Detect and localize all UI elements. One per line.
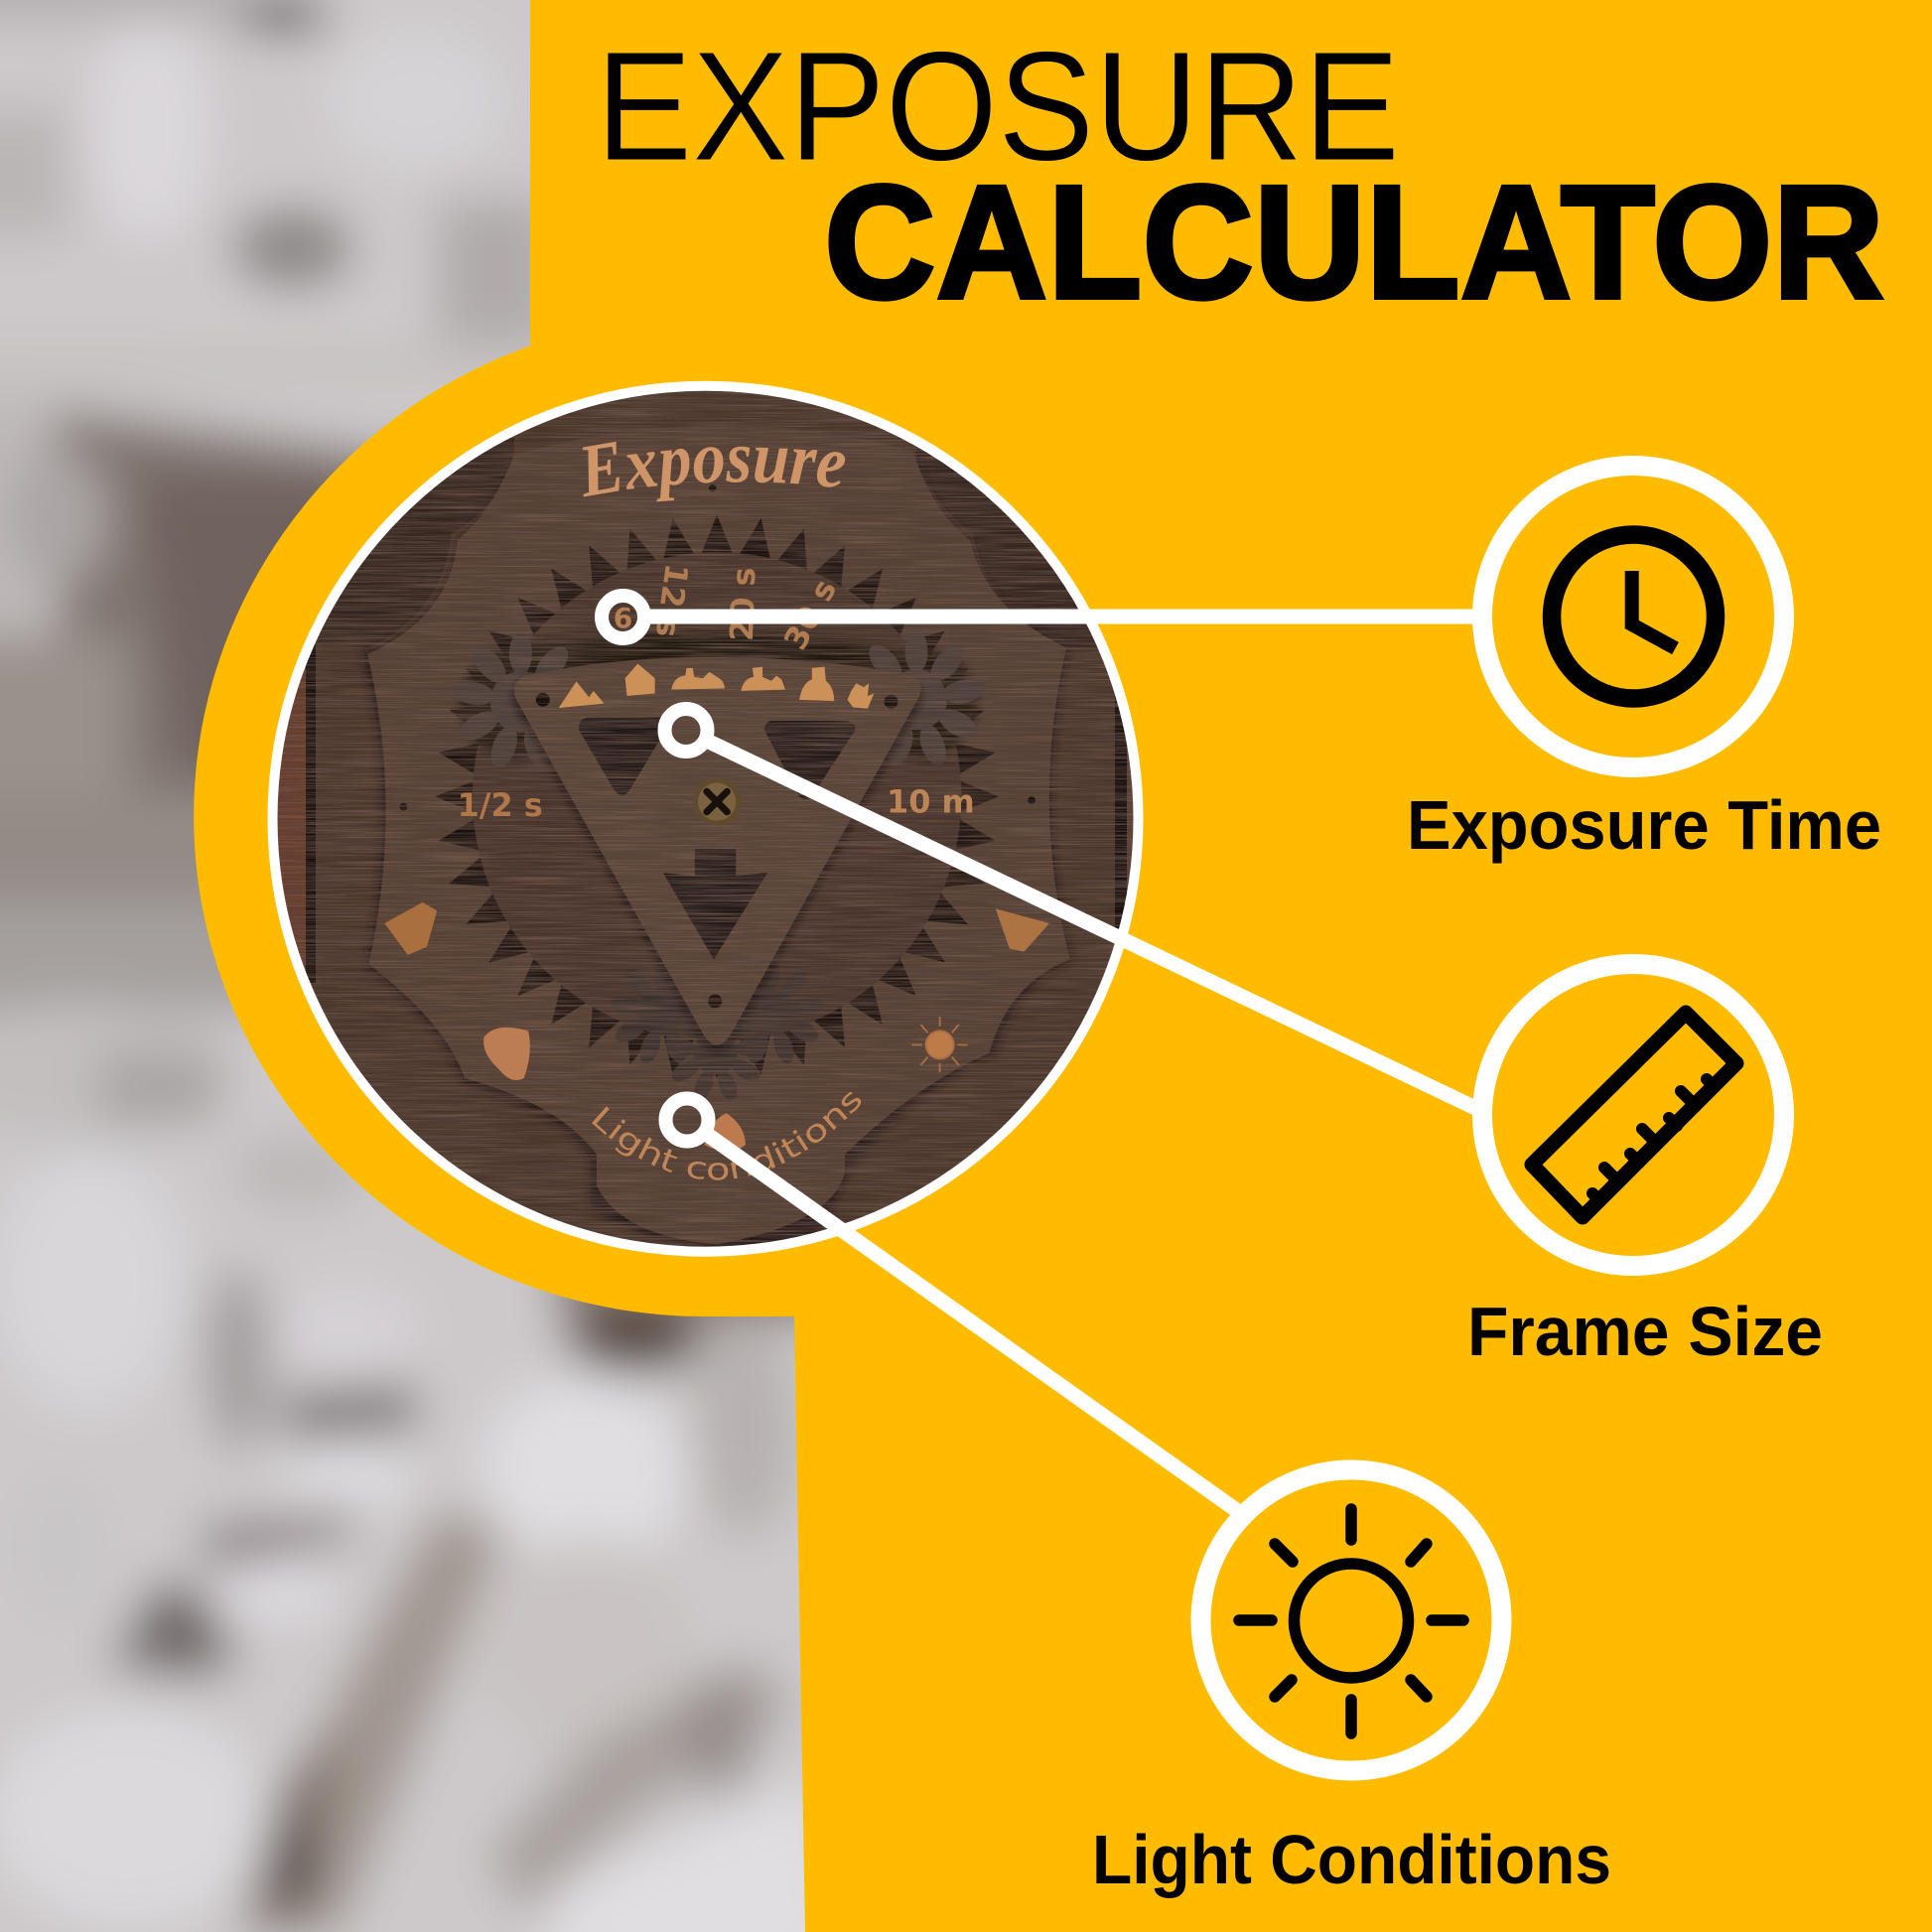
label: Frame Size [1467, 1293, 1823, 1370]
icon: sun [1239, 1509, 1463, 1733]
icon: clock [1552, 534, 1716, 699]
dial labels: 20 s [723, 567, 762, 641]
screw [693, 777, 741, 826]
connector: exposure time [602, 596, 1475, 638]
wood photo white border [272, 386, 1138, 1252]
connector: light conditions [665, 1098, 1239, 1512]
plate icon: house [384, 902, 437, 955]
front plate [367, 425, 1070, 1244]
plate icon: sun [912, 1017, 968, 1072]
shadow band above pointer [461, 633, 977, 759]
gear wheel teeth [435, 515, 999, 1078]
plate icon: cloud [704, 1113, 746, 1152]
side strip and slots [268, 635, 1147, 993]
hole detail: 6 [614, 602, 632, 634]
pointer light icons [559, 663, 874, 709]
small star gears behind pointer [450, 630, 987, 771]
wooden exposure calculator photo [278, 391, 1134, 1247]
dial labels: 30 s [776, 573, 844, 656]
engraved word: Exposure: Exposure [582, 441, 846, 502]
label: Exposure Time [1407, 786, 1881, 864]
title line: EXPOSURE: EXPOSURE [596, 20, 1400, 194]
callout: light conditions [1092, 1469, 1611, 1898]
icon: ruler [1532, 1013, 1736, 1217]
callout: exposure time [1407, 466, 1881, 864]
title line: CALCULATOR: CALCULATOR [824, 151, 1884, 333]
callout: frame size [1467, 964, 1823, 1370]
engraved word: Light conditions: Light conditions [592, 1092, 862, 1180]
pointer shadow [514, 663, 921, 1051]
plate icon: tent [996, 908, 1049, 952]
plate shadow [362, 458, 1071, 1250]
ring [1482, 466, 1784, 767]
title [596, 20, 1884, 333]
ring [1201, 1469, 1501, 1771]
plate icon: stone [483, 1028, 530, 1080]
wood grain [268, 377, 1152, 1261]
wood base [310, 391, 1120, 1247]
label: Light Conditions [1092, 1821, 1611, 1898]
dial labels: 12 s [648, 561, 696, 639]
dark corner wood [306, 426, 1122, 648]
gear wheel disc [473, 552, 961, 1041]
ring [1482, 964, 1784, 1266]
triangular pointer [514, 657, 921, 1045]
dial labels: 1/2 s [458, 786, 543, 824]
blurred background photo [0, 0, 854, 1932]
screw holes [400, 484, 1035, 1008]
small star gears at pointer tip [608, 958, 826, 1103]
connector: frame size [665, 709, 1475, 1108]
pointer windows [579, 718, 855, 800]
dial labels [458, 561, 975, 824]
pointer arrow window [663, 849, 767, 959]
dial labels: 10 m [887, 782, 975, 820]
